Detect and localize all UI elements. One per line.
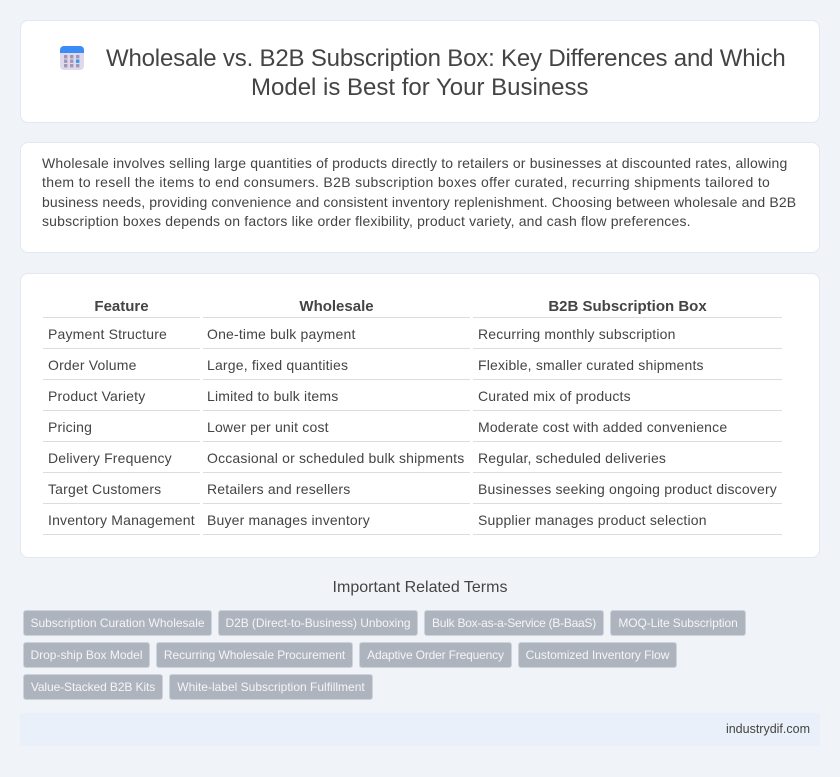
comparison table: Lower per unit cost [207, 419, 329, 435]
intro paragraph: business needs, providing convenience and consistent inventory replenishment. Choosing between wholesale and B2B [42, 194, 796, 210]
comparison table: Curated mix of products [478, 388, 631, 404]
panel: title card [20, 20, 820, 123]
related term tags: Adaptive Order Frequency [367, 648, 504, 662]
intro paragraph [42, 155, 796, 229]
comparison table: Businesses seeking ongoing product discovery [478, 481, 777, 497]
related term tags: Bulk Box-as-a-Service (B-BaaS) [432, 616, 596, 630]
footer bar [20, 713, 820, 746]
comparison table: B2B Subscription Box [548, 298, 707, 315]
footer source text: industrydif.com [726, 722, 810, 736]
related term tags: D2B (Direct-to-Business) Unboxing [225, 616, 411, 630]
related term tags: MOQ-Lite Subscription [618, 616, 738, 630]
panel: comparison table card [20, 273, 820, 558]
related term tags: Drop-ship Box Model [30, 648, 143, 662]
related term tags: Subscription Curation Wholesale [30, 616, 205, 630]
comparison table: Limited to bulk items [207, 388, 338, 404]
comparison table: Product Variety [48, 388, 145, 404]
comparison table: Wholesale [299, 298, 374, 315]
comparison table: Moderate cost with added convenience [478, 419, 727, 435]
comparison table: Regular, scheduled deliveries [478, 450, 666, 466]
intro paragraph: Wholesale involves selling large quantities of products directly to retailers or businesses at discounted rates, allowing [42, 155, 788, 171]
related term tags [23, 610, 746, 700]
panel: intro text card [20, 142, 820, 253]
comparison table: Occasional or scheduled bulk shipments [207, 450, 464, 466]
comparison table: Retailers and resellers [207, 481, 350, 497]
comparison table: Supplier manages product selection [478, 512, 707, 528]
comparison table: Large, fixed quantities [207, 357, 348, 373]
comparison table: Delivery Frequency [48, 450, 172, 466]
comparison table: Recurring monthly subscription [478, 326, 676, 342]
comparison table: Pricing [48, 419, 92, 435]
intro paragraph: subscription boxes depends on factors like order flexibility, product variety, and cash flow preferences. [42, 213, 691, 229]
related term tags: Value-Stacked B2B Kits [31, 680, 155, 694]
intro paragraph: them to resell the items to end consumers. B2B subscription boxes offer curated, recurring shipments tailored to [42, 174, 770, 190]
comparison table: One-time bulk payment [207, 326, 356, 342]
heading: related terms: Important Related Terms [333, 579, 507, 596]
comparison table: Payment Structure [48, 326, 167, 342]
related term tags: Customized Inventory Flow [526, 648, 669, 662]
title [106, 45, 786, 101]
comparison table: Buyer manages inventory [207, 512, 370, 528]
comparison table: Feature [94, 298, 149, 315]
related term tags: White-label Subscription Fulfillment [177, 680, 365, 694]
comparison table: Order Volume [48, 357, 137, 373]
icon: calendar [60, 46, 84, 70]
related term tags: Recurring Wholesale Procurement [164, 648, 345, 662]
comparison table: Flexible, smaller curated shipments [478, 357, 704, 373]
comparison table [43, 298, 782, 535]
comparison table: Target Customers [48, 481, 161, 497]
comparison table: Inventory Management [48, 512, 195, 528]
title: Wholesale vs. B2B Subscription Box: Key Differences and Which [106, 45, 786, 72]
title: Model is Best for Your Business [251, 74, 589, 101]
